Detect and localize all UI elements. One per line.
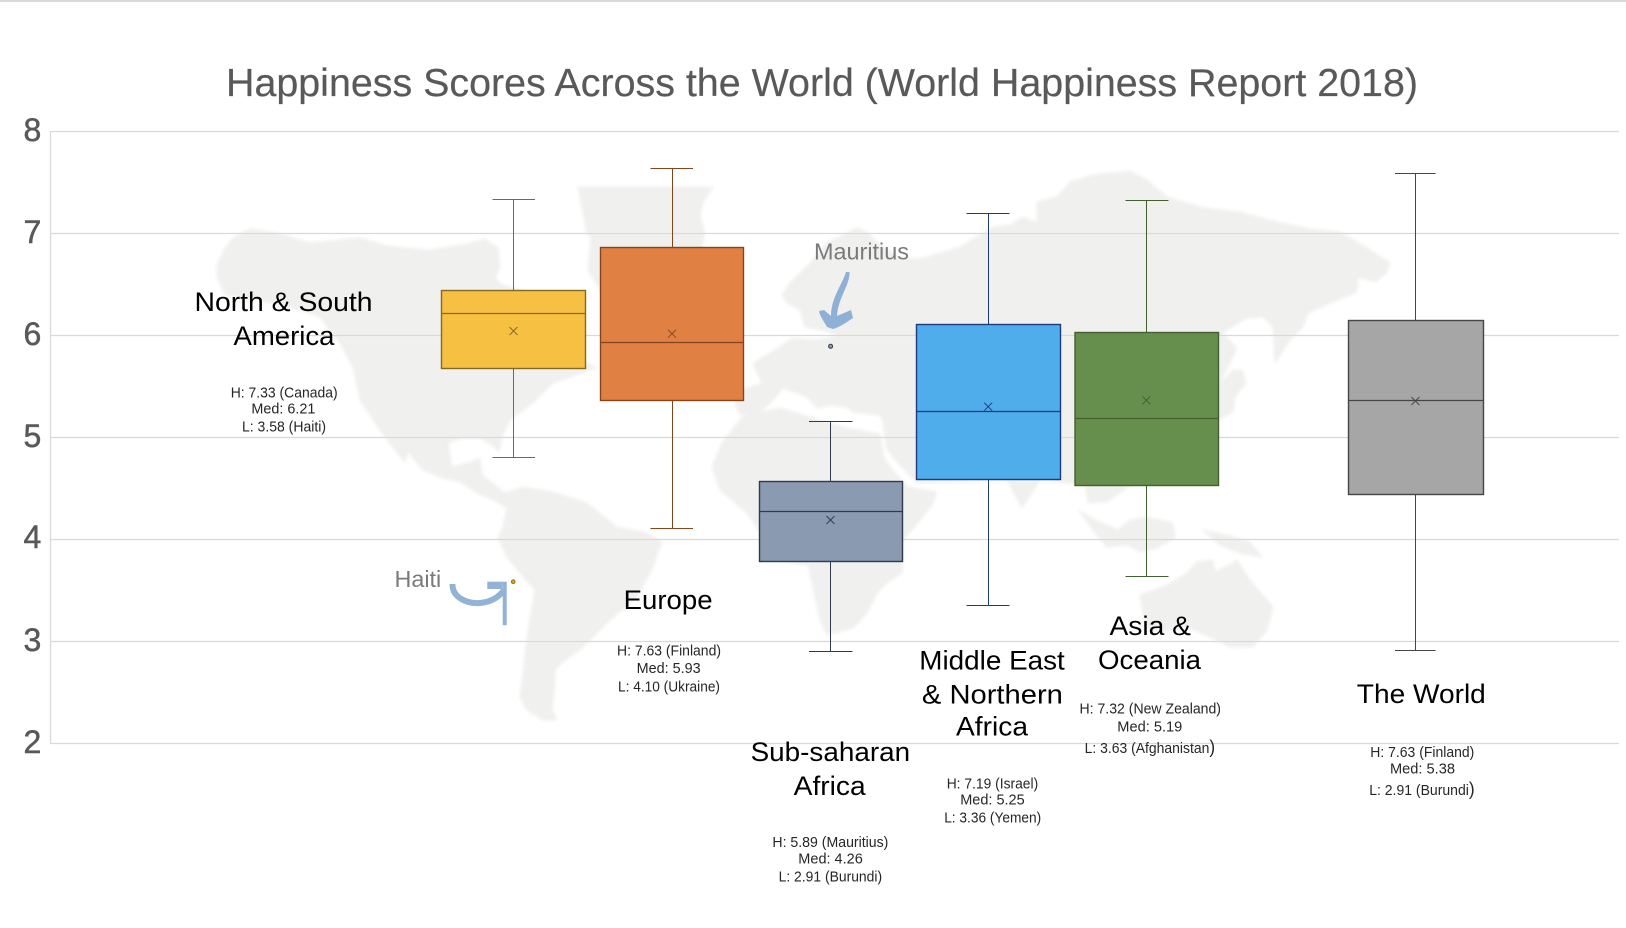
label: North & South America: North & South: [194, 287, 372, 317]
label: North & South America: [194, 287, 372, 436]
label: Asia & Oceania: L: 3.63 (Afghanistan): [1085, 737, 1215, 757]
label: Europe: H: 7.63 (Finland): [617, 644, 721, 660]
y axis labels: 2: [24, 724, 41, 760]
arrow: Haiti: [452, 582, 507, 625]
label: Asia & Oceania: Oceania: [1098, 645, 1202, 675]
y axis labels: 7: [24, 214, 41, 250]
label: The World: Med: 5.38: [1390, 762, 1455, 778]
label: Asia & Oceania: [1080, 611, 1221, 757]
label: Middle East & Northern Africa: Med: 5.25: [960, 792, 1025, 808]
label: The World: The World: [1357, 679, 1486, 709]
y axis labels: 6: [24, 316, 41, 352]
label: North & South America: Med: 6.21: [251, 402, 315, 418]
box plot: North & South America: [442, 200, 586, 584]
label: Europe: Europe: [624, 585, 713, 615]
label: Sub-saharan Africa: [751, 737, 910, 886]
label: North & South America: L: 3.58 (Haiti): [242, 420, 326, 436]
y axis labels: [24, 112, 41, 760]
title: Happiness Scores Across the World (World Happiness Report 2018): [226, 62, 1418, 105]
callout: Haiti: Haiti: [394, 566, 441, 592]
label: Sub-saharan Africa: Africa: [794, 771, 867, 801]
y axis labels: 3: [24, 622, 41, 658]
label: Asia & Oceania: Med: 5.19: [1117, 720, 1182, 736]
box plot: Sub-saharan Africa: [760, 344, 902, 652]
y axis labels: 8: [24, 112, 41, 148]
label: Middle East & Northern Africa: [919, 646, 1065, 826]
label: Europe: [617, 585, 721, 696]
label: Sub-saharan Africa: Sub-saharan: [751, 737, 910, 767]
box plot: Asia & Oceania: [1075, 200, 1218, 576]
box plot: Middle East & Northern Africa: [916, 214, 1060, 606]
label: North & South America: H: 7.33 (Canada): [231, 386, 338, 402]
world map background: [217, 171, 1390, 720]
label: Middle East & Northern Africa: Middle East: [919, 646, 1065, 676]
callout: Mauritius: Mauritius: [814, 238, 909, 264]
label: Middle East & Northern Africa: H: 7.19 (Israel): [947, 776, 1038, 792]
arrow: Mauritius: [819, 272, 853, 329]
label: Middle East & Northern Africa: L: 3.36 (Yemen): [944, 810, 1041, 826]
y axis labels: 5: [24, 418, 41, 454]
label: The World: H: 7.63 (Finland): [1370, 745, 1474, 761]
label: The World: L: 2.91 (Burundi): [1369, 779, 1475, 799]
label: Asia & Oceania: H: 7.32 (New Zealand): [1080, 702, 1221, 718]
label: North & South America: America: [234, 321, 335, 351]
label: Europe: Med: 5.93: [637, 661, 701, 677]
box plot: The World: [1348, 174, 1484, 650]
label: The World: [1357, 679, 1486, 799]
label: Middle East & Northern Africa: & Northern: [922, 680, 1063, 710]
y axis labels: 4: [24, 519, 41, 555]
box plot: Europe: [600, 168, 744, 528]
label: Sub-saharan Africa: Med: 4.26: [798, 852, 863, 868]
label: Europe: L: 4.10 (Ukraine): [618, 680, 720, 696]
label: Sub-saharan Africa: L: 2.91 (Burundi): [779, 870, 882, 886]
label: Sub-saharan Africa: H: 5.89 (Mauritius): [772, 835, 888, 851]
label: Asia & Oceania: Asia &: [1110, 611, 1191, 641]
label: Middle East & Northern Africa: Africa: [956, 712, 1029, 742]
